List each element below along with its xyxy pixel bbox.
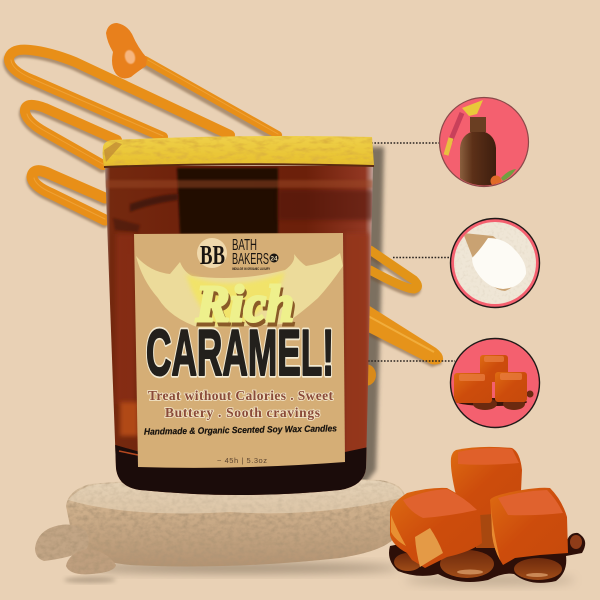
CARAMEL title: CARAMEL! [146,316,334,389]
bottle [470,117,486,132]
size text: ~ 45h | 5.3oz [217,456,267,465]
glass reflections [177,168,278,234]
back cube [451,447,522,515]
melted caramel pool [389,533,585,583]
small stones [64,577,116,583]
benefits text: Treat without Calories . Sweet [148,388,334,403]
logo: INDULGE IN ORGANIC LUXURY [232,267,271,271]
caramel blob [106,23,147,78]
pedestal stone [35,478,405,583]
caramel drizzle behind jar, right [358,250,443,386]
large caramel cubes [389,447,585,585]
logo [197,237,278,271]
logo: BAKERS [232,251,269,268]
label [134,233,345,468]
dark wax base [115,444,366,495]
dotted connector lines [368,143,455,361]
gap filler between cubes [476,510,496,548]
Rich title: Rich [197,280,296,337]
yellow splash [136,253,343,328]
coconut flakes [472,238,526,289]
benefits text: Buttery . Sooth cravings [165,405,320,420]
ingredient: coconut [450,218,540,308]
left cube [390,488,482,568]
dropper [450,113,462,142]
right cube [490,488,568,565]
logo: BATH [232,237,257,254]
candle jar [103,136,374,500]
ingredient: caramel cubes [450,338,540,428]
lid [103,136,374,167]
jar shadow [350,147,384,490]
logo: 24 [270,256,278,262]
Rich title: Rich [195,276,294,333]
ingredient: oil bottle [440,98,528,186]
spoon [464,233,512,291]
CARAMEL title: CARAMEL! [146,316,334,389]
label paper [134,233,345,468]
CARAMEL title [146,316,334,389]
jar glass [105,166,373,495]
fruit [490,176,502,185]
caramel drizzle behind jar, left [8,23,278,223]
handmade text: Handmade & Organic Scented Soy Wax Candles [144,423,337,437]
logo: BB [200,240,225,270]
benefits text [148,388,334,420]
small caramel drop [358,364,376,386]
